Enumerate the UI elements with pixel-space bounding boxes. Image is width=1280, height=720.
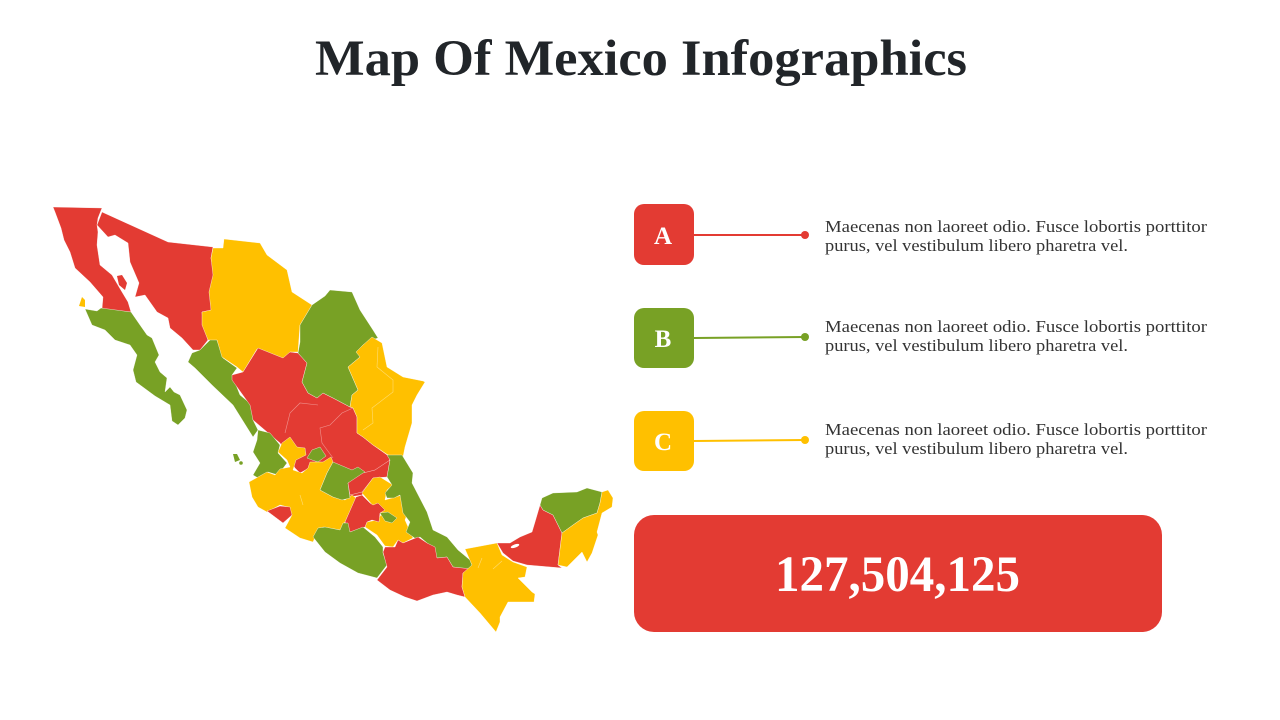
- population number: 127,504,125: [775, 547, 1020, 603]
- states: Durango, Zacatecas, San Luis Potosi: [232, 348, 390, 497]
- state: Hidalgo: [348, 460, 390, 495]
- row A: [634, 204, 1208, 265]
- state: Campeche: [497, 505, 562, 568]
- connector C: [694, 436, 809, 444]
- state: Nayarit: [253, 430, 287, 478]
- state: Tamaulipas: [348, 337, 425, 457]
- badge A: [634, 204, 694, 265]
- map of Mexico: [53, 207, 613, 632]
- text B: purus, vel vestibulum libero pharetra vel.: [825, 336, 1128, 355]
- island: Angel de la Guarda: [117, 275, 127, 290]
- state: Sinaloa: [188, 338, 258, 437]
- population callout: [634, 515, 1162, 632]
- state: Guanajuato: [320, 462, 365, 500]
- title: Map Of Mexico Infographics: [315, 31, 967, 87]
- state: Jalisco and Michoacan: [249, 437, 356, 542]
- state: Baja California: [53, 207, 131, 312]
- badge B: B: [655, 326, 671, 353]
- connector B: [694, 333, 809, 341]
- state: Sonora: [97, 212, 214, 350]
- badge A: A: [654, 223, 672, 250]
- state: Veracruz: [385, 455, 472, 569]
- islands: Marias: [233, 454, 243, 465]
- text A: Maecenas non laoreet odio. Fusce lobortis porttitor: [825, 217, 1208, 236]
- badge C: C: [654, 429, 672, 456]
- state: Baja California Sur: [85, 308, 187, 425]
- state: Tabasco and Chiapas: [462, 543, 535, 632]
- state: Queretaro and Mexico red: [345, 495, 385, 532]
- text B: Maecenas non laoreet odio. Fusce lobortis porttitor: [825, 317, 1208, 336]
- state: Guerrero: [313, 523, 387, 578]
- row B: [634, 308, 1208, 368]
- lagoon: Terminos: [510, 543, 520, 549]
- state: Coahuila and Nuevo Leon: [298, 290, 378, 407]
- badge C: [634, 411, 694, 471]
- state: Yucatan: [540, 488, 602, 533]
- connector A: [694, 231, 809, 239]
- state: Colima: [267, 506, 292, 523]
- state: Puebla and Mexico: [362, 477, 413, 547]
- text A: purus, vel vestibulum libero pharetra vel.: [825, 236, 1128, 255]
- text A: [825, 217, 1208, 255]
- state: Aguascalientes: [307, 447, 326, 462]
- state: Chihuahua: [202, 239, 312, 372]
- state: Quintana Roo: [558, 490, 613, 567]
- state: Oaxaca: [377, 537, 472, 601]
- text C: purus, vel vestibulum libero pharetra vel.: [825, 439, 1128, 458]
- text C: [825, 420, 1208, 458]
- badge B: [634, 308, 694, 368]
- text B: [825, 317, 1208, 355]
- state: Morelos: [380, 512, 397, 523]
- text C: Maecenas non laoreet odio. Fusce lobortis porttitor: [825, 420, 1208, 439]
- island: Cedros: [79, 297, 85, 307]
- row C: [634, 411, 1208, 471]
